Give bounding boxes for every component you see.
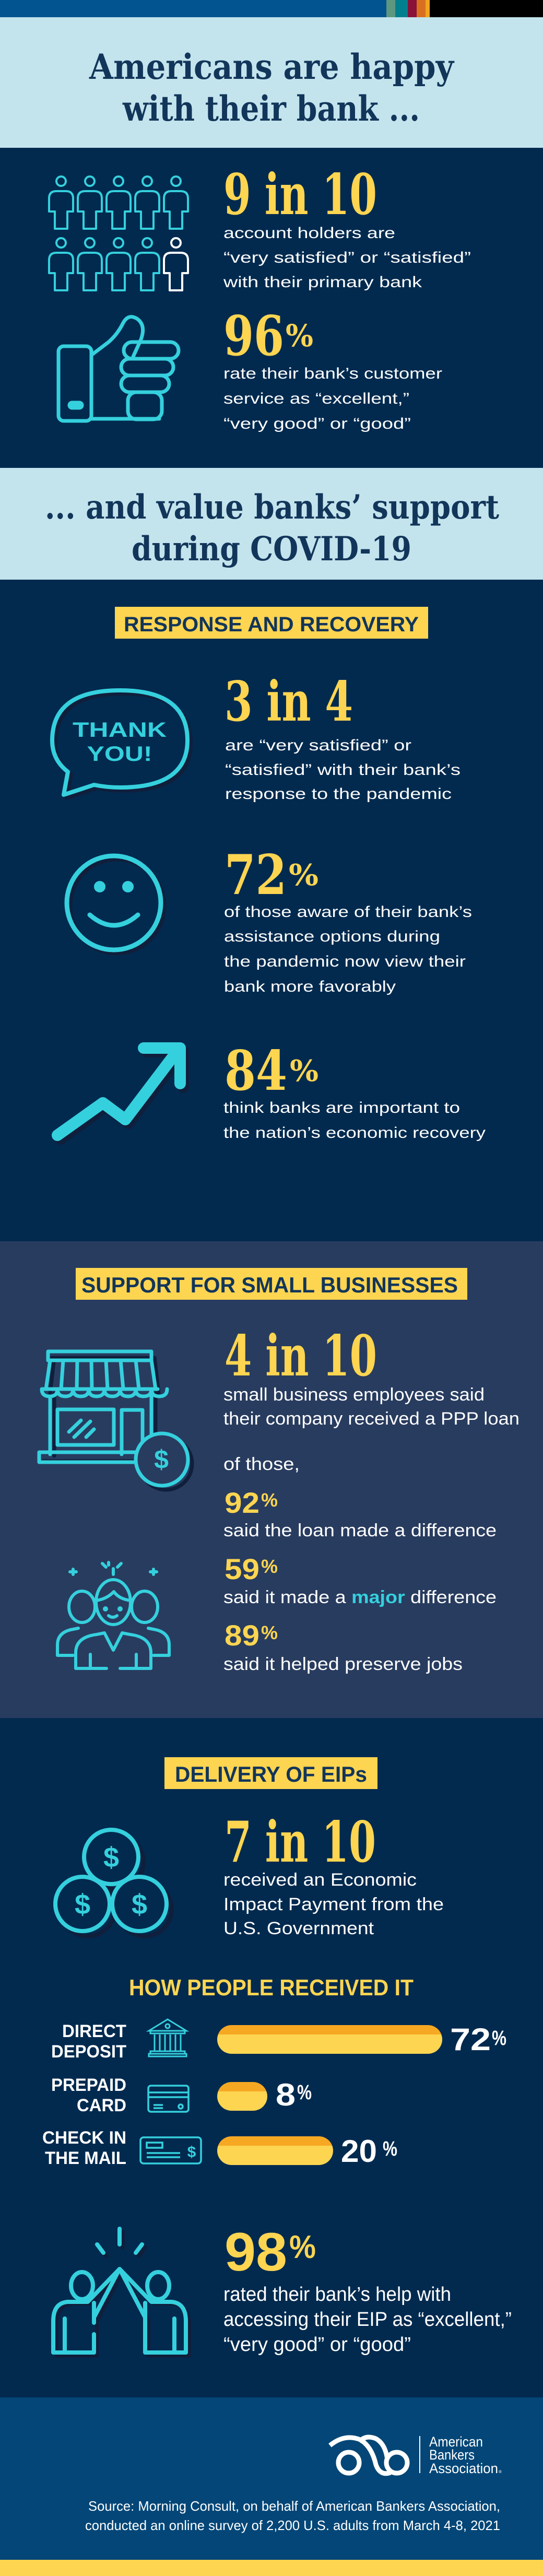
stat: 7 in 10: U.S. Government [223,1919,374,1938]
stat: 3 in 4: “satisfied” with their bank’s [225,761,461,779]
stat: 7 in 10: received an Economic [223,1870,417,1890]
stat: 3 in 4: 3 in 4 [225,669,353,734]
logo: American Bankers Association: American [429,2434,483,2450]
stat: 89%: said it helped preserve jobs [223,1654,463,1674]
stat: 96%: “very good” or “good” [223,415,411,432]
bar row: prepaid card [51,2075,312,2115]
stat: 89%: 89 [225,1619,259,1652]
bar row: prepaid card: CARD [77,2096,126,2115]
top color bar [0,0,543,17]
bar row: direct deposit: DEPOSIT [51,2042,126,2062]
bar row: prepaid card: % [297,2081,312,2104]
stat: 59%: % [261,1556,278,1577]
label: response and recovery [115,607,428,639]
bar row: direct deposit [51,2019,506,2062]
source note: Source: Morning Consult, on behalf of American Bankers Association, [88,2498,500,2514]
stat: 84%: think banks are important to [223,1099,460,1116]
stat: 72%: 72 [225,842,287,907]
stat: 98%: “very good” or “good” [223,2334,411,2356]
stat: 7 in 10: Impact Payment from the [223,1895,444,1914]
stat: 98%: 98 [225,2222,287,2283]
stat: 72% [224,842,472,995]
stat: 59%: said it made a major difference [223,1587,497,1607]
stat: 72%: the pandemic now view their [224,953,466,970]
stat: 4 in 10 [223,1323,520,1474]
stat: 59% [223,1552,497,1607]
icon: storefront [39,1351,192,1490]
label: support for small businesses: SUPPORT FOR SMALL BUSINESSES [81,1273,458,1297]
stat: 4 in 10: their company received a PPP loan [223,1409,520,1429]
stat: 3 in 4: response to the pandemic [225,785,452,803]
bar row: prepaid card: PREPAID [51,2075,126,2095]
stat: 89%: % [261,1622,278,1643]
logo: American Bankers Association [330,2434,502,2476]
stat: 72%: assistance options during [224,928,440,945]
stat: 89% [223,1619,463,1674]
stat: 9 in 10: “very satisfied” or “satisfied” [223,249,471,266]
stat: 84%: the nation’s economic recovery [223,1124,486,1142]
stat: 96% [223,303,442,432]
icon: thank you bubble: THANK [73,719,167,742]
stat: 4 in 10: of those, [223,1454,300,1474]
title [89,46,454,129]
icon: high five [53,2229,189,2356]
bar row: direct deposit: DIRECT [62,2021,126,2041]
stat: 84%: % [290,1054,318,1088]
icon: coins [55,1830,172,1936]
bar row: check in the mail: $ [187,2144,196,2161]
icon: coins: $ [75,1889,90,1920]
title: with their bank ... [122,88,420,129]
stat: 96%: 96 [223,303,284,368]
stat: 92%: said the loan made a difference [223,1521,497,1540]
label: delivery of EIPs: DELIVERY OF EIPs [175,1762,367,1786]
stat: 92%: 92 [225,1486,259,1519]
logo: American Bankers Association: Bankers [429,2447,475,2463]
stat: 84%: 84 [225,1038,287,1103]
icon: smiley [67,856,164,953]
source note: conducted an online survey of 2,200 U.S. adults from March 4-8, 2021 [85,2518,500,2533]
stat: 4 in 10: small business employees said [223,1385,485,1405]
bar row: prepaid card: 8 [276,2077,296,2112]
icon: happy group [57,1562,169,1668]
icon: storefront: $ [154,1445,169,1474]
stat: 92% [223,1486,497,1540]
stat: 98%: rated their bank’s help with [223,2284,451,2306]
heading: how people received it: HOW PEOPLE RECEIVED IT [129,1975,414,2001]
stat: 9 in 10 [223,162,471,291]
source note [85,2498,500,2533]
logo: American Bankers Association: ® [499,2469,502,2474]
subtitle [45,488,499,569]
icon: coins: $ [103,1842,119,1873]
bar row: check in the mail: THE MAIL [45,2148,126,2168]
stat: 9 in 10: account holders are [223,225,395,242]
icon: thank you bubble [52,690,191,798]
icon: people grid [49,177,188,290]
stat: 98%: accessing their EIP as “excellent,” [223,2309,512,2331]
icon: thank you bubble: YOU! [87,743,152,766]
stat: 3 in 4 [225,669,461,803]
stat: 59%: 59 [225,1552,259,1585]
stat: 98% [223,2222,512,2356]
stat: 98%: % [289,2229,316,2265]
icon: rising arrow [57,1048,183,1139]
bar row: direct deposit: 72 [450,2022,491,2057]
stat: 7 in 10 [223,1809,444,1938]
stat: 72%: bank more favorably [224,978,396,995]
stat: 9 in 10: 9 in 10 [223,162,377,228]
stat: 72%: % [289,858,318,892]
stat: 4 in 10: 4 in 10 [225,1323,377,1389]
stat: 84% [223,1038,486,1142]
title: Americans are happy [89,46,454,87]
stat: 72%: of those aware of their bank’s [224,903,472,921]
bar row: direct deposit: % [492,2027,506,2050]
stat: 96%: rate their bank’s customer [223,365,442,382]
bar row: check in the mail: 20 [341,2134,377,2169]
logo: American Bankers Association: Association [429,2461,498,2476]
stat: 92%: % [261,1489,278,1511]
bar row: check in the mail: % [383,2137,397,2160]
stat: 96%: % [286,318,313,354]
stat: 9 in 10: with their primary bank [223,274,422,291]
stat: 7 in 10: 7 in 10 [225,1809,376,1875]
icon: thumbs up [58,317,179,421]
bar row: check in the mail: CHECK IN [42,2128,126,2148]
label: response and recovery: RESPONSE AND RECOVERY [124,613,419,636]
bar row: check in the mail [42,2128,397,2169]
stat: 96%: service as “excellent,” [223,390,409,407]
subtitle: during COVID-19 [132,530,411,569]
stat: 3 in 4: are “very satisfied” or [225,737,411,754]
icon: coins: $ [132,1889,147,1920]
